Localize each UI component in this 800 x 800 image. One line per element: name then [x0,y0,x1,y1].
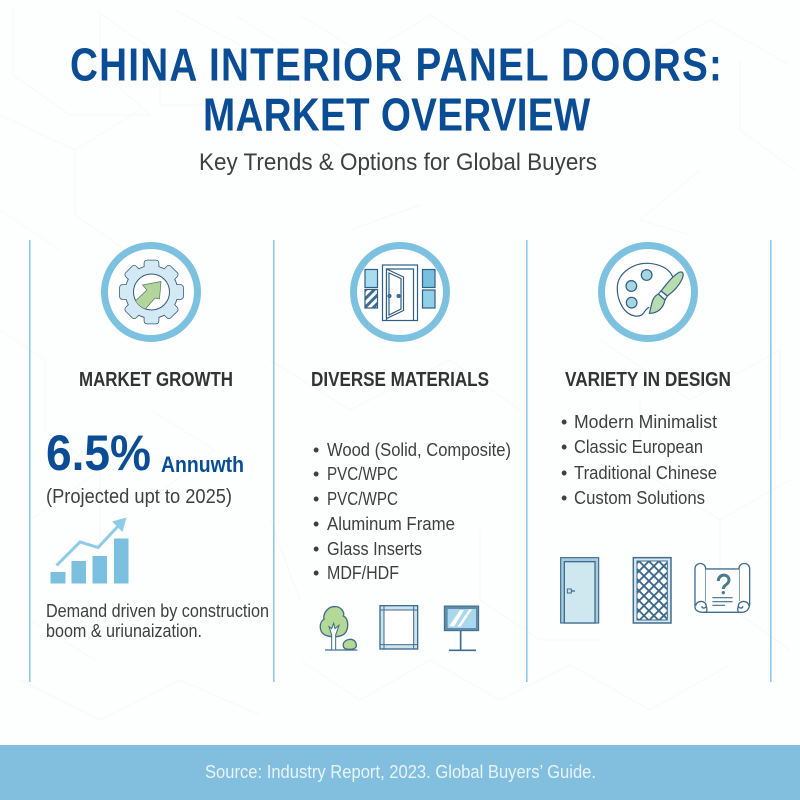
bar chart with trend arrow [50,518,128,584]
statistic: 6.5% annual growth: 6.5% [46,425,151,481]
title: MARKET OVERVIEW [203,89,591,140]
list: designs: Classic European [574,437,703,457]
list: designs [561,412,717,508]
panel: market growth [46,246,269,641]
text: demand description: boom & uriunaization. [46,621,202,641]
list: designs: • [561,412,567,432]
list: materials: MDF/HDF [327,563,399,583]
title [70,39,722,140]
subtitle: Key Trends & Options for Global Buyers [199,149,597,176]
text: demand description: Demand driven by construction [46,601,269,621]
list: designs: Traditional Chinese [574,463,717,483]
icon: gear with arrow [104,246,198,338]
list: materials: Glass Inserts [327,539,422,559]
statistic: 6.5% annual growth [46,425,244,481]
list: materials: • [313,514,319,534]
list: materials: PVC/WPC [327,464,398,484]
list: materials: Wood (Solid, Composite) [327,440,511,460]
panel: variety in design [561,246,750,623]
icon: door and windows [354,246,446,338]
list: materials: • [313,440,319,460]
list: materials: • [313,489,319,509]
footer band [0,745,800,800]
list: designs: • [561,463,567,483]
list: materials [313,440,511,583]
list: designs: • [561,488,567,508]
heading: diverse materials: DIVERSE MATERIALS [311,369,489,391]
list: materials: • [313,539,319,559]
list: designs: Custom Solutions [574,488,705,508]
list: designs: Modern Minimalist [574,412,717,432]
text: source line: Source: Industry Report, 2023. Global Buyers’ Guide. [205,762,596,782]
icon: palette and brush [602,246,694,338]
statistic: 6.5% annual growth: Annuwth [161,452,244,477]
text: demand description [46,601,269,641]
icon: plain door [561,558,599,623]
list: designs: • [561,437,567,457]
list: materials: • [313,464,319,484]
heading: market growth: MARKET GROWTH [79,369,233,391]
panel: diverse materials [311,246,511,650]
icon: glass panel on stand [444,606,479,650]
icon: frame [380,606,418,649]
list: materials: PVC/WPC [327,489,398,509]
list: materials: Aluminum Frame [327,514,455,534]
text: projection note: (Projected upt to 2025) [46,486,232,508]
list: materials: • [313,563,319,583]
icon: blueprint scroll with question mark [695,563,750,612]
icon: lattice door [633,558,671,623]
title: CHINA INTERIOR PANEL DOORS: [70,39,722,90]
heading: variety in design: VARIETY IN DESIGN [565,369,731,391]
icon: tree and shrub [320,607,357,650]
